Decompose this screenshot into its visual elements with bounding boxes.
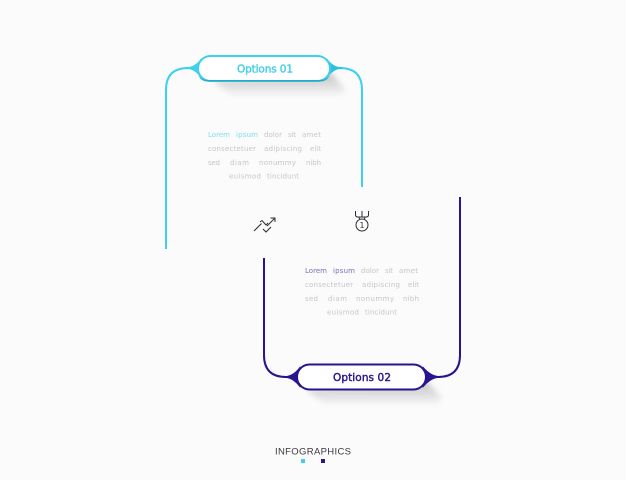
text block: option 01 body: adipiscing [264, 145, 302, 153]
text block: option 01 body: sed [208, 159, 220, 167]
long drop shadow of pill 02 [306, 381, 442, 406]
footer title [275, 446, 351, 463]
text block: option 01 body: euismod [229, 172, 261, 180]
text block: option 02 body: Lorem [305, 267, 327, 275]
text block: option 02 body: nibh [403, 295, 419, 303]
text block: option 01 body: nibh [306, 159, 321, 167]
text block: option 01 body: dolor [264, 131, 282, 139]
footer title: INFOGRAPHICS [275, 446, 351, 458]
indigo frame line [264, 197, 460, 377]
text block: option 02 body: ipsum [333, 267, 355, 275]
text block: option 01 body: consectetuer [208, 145, 256, 153]
text block: option 02 body: amet [399, 267, 418, 275]
indigo footer square [321, 459, 325, 463]
text block: option 01 body: diam [230, 159, 249, 167]
text block: option 01 body [208, 131, 321, 180]
text block: option 02 body [305, 267, 419, 316]
text block: option 02 body: sit [385, 267, 393, 275]
text block: option 02 body: nonummy [356, 295, 394, 303]
text block: option 01 body: ipsum [236, 131, 258, 139]
panel: option 01 frame [166, 56, 362, 249]
pill 02 [297, 364, 426, 390]
right connector [327, 59, 342, 78]
text block: option 01 body: nonummy [259, 159, 296, 167]
icon: medal number one: 1 [360, 221, 365, 230]
text block: option 01 body: amet [302, 131, 321, 139]
icon: rising chart arrow [254, 218, 275, 232]
cyan footer square [301, 459, 305, 463]
pill 02 label: Options 02 [333, 372, 391, 384]
icon: medal number one [356, 211, 368, 231]
left connector [186, 59, 201, 78]
text block: option 02 body: consectetuer [305, 281, 353, 289]
text block: option 02 body: sed [305, 295, 318, 303]
cyan frame line [166, 68, 362, 249]
text block: option 01 body: Lorem [208, 131, 230, 139]
text block: option 01 body: elit [310, 145, 321, 153]
text block: option 01 body: tincidunt [267, 172, 299, 180]
panel: option 02 frame [264, 197, 460, 406]
text block: option 02 body: tincidunt [365, 308, 397, 316]
text block: option 02 body: diam [328, 295, 347, 303]
text block: option 02 body: elit [408, 281, 419, 289]
pill 01 [198, 56, 330, 82]
left connector [284, 367, 300, 387]
long drop shadow of pill 01 [213, 72, 346, 97]
text block: option 02 body: euismod [327, 308, 359, 316]
pill 01 label: Options 01 [237, 63, 293, 75]
right connector [423, 367, 440, 387]
text block: option 01 body: sit [288, 131, 296, 139]
text block: option 02 body: adipiscing [362, 281, 400, 289]
text block: option 02 body: dolor [361, 267, 379, 275]
